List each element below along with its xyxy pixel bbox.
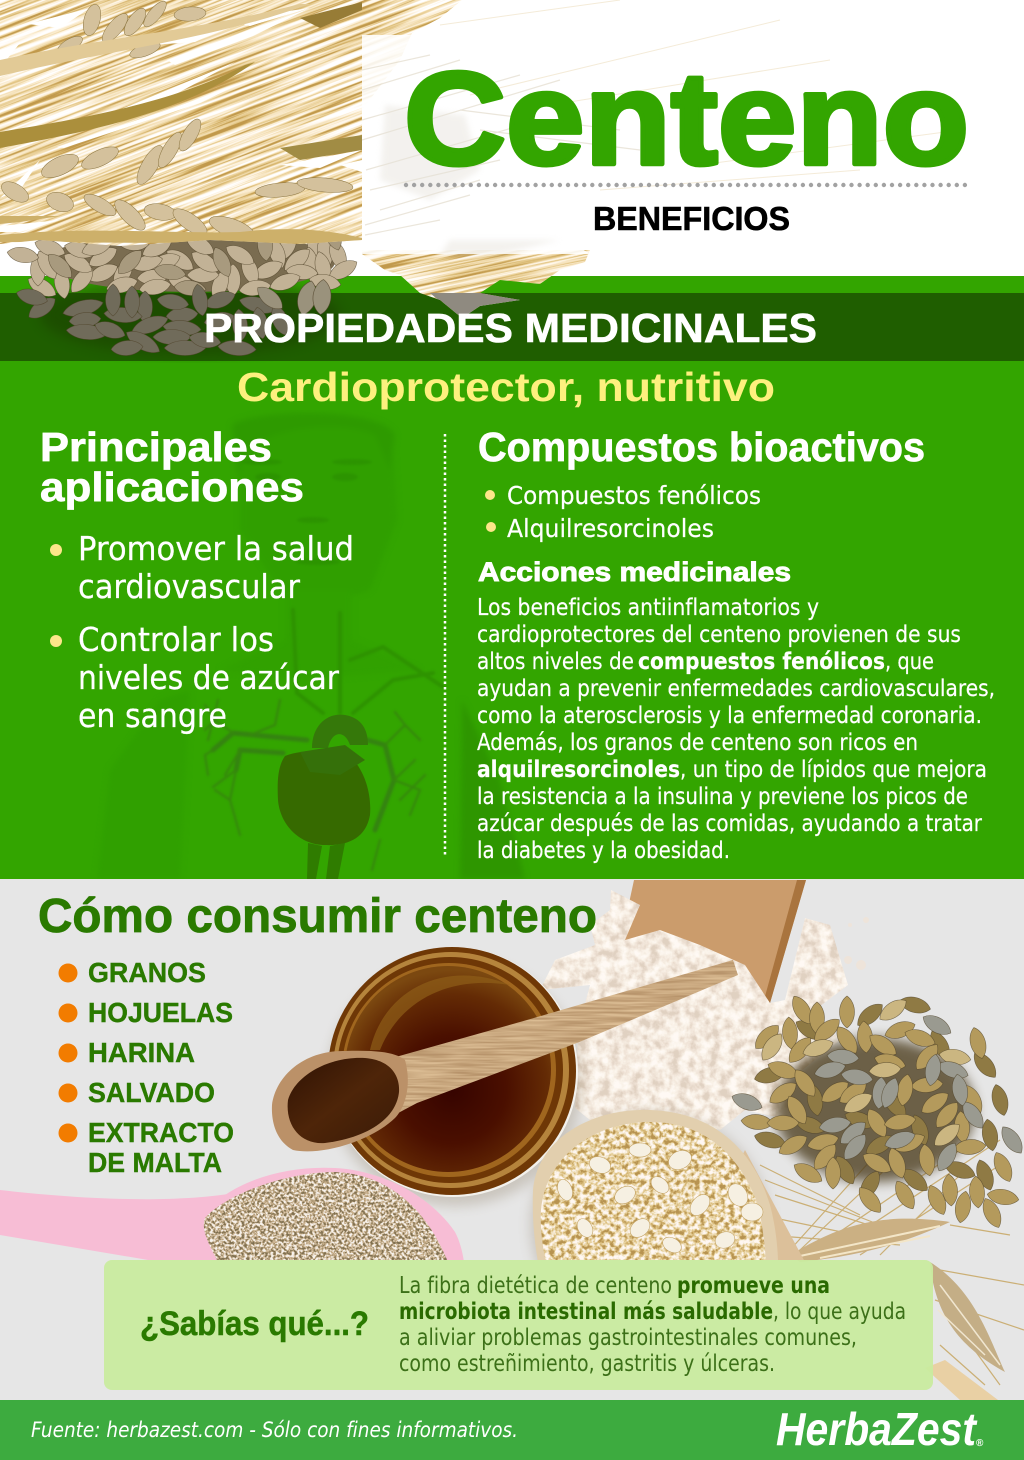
- divider: [444, 434, 446, 856]
- heading: medicinal properties: PROPIEDADES MEDICINALES: [204, 305, 817, 351]
- callout text: , lo que ayuda: [773, 1299, 906, 1325]
- list: consumption forms: EXTRACTO: [88, 1117, 234, 1148]
- subtitle: BENEFICIOS: [593, 200, 790, 237]
- list: consumption forms: DE MALTA: [88, 1147, 222, 1178]
- source note: Fuente: herbazest.com - Sólo con fines informativos.: [31, 1418, 518, 1442]
- illustration: wooden spoon with syrup: [272, 960, 738, 1151]
- subheading: medicinal actions: Acciones medicinales: [478, 557, 791, 587]
- text: medicinal actions paragraph: alquilresorcinoles: [477, 757, 680, 783]
- callout text: a aliviar problemas gastrointestinales comunes,: [399, 1325, 857, 1351]
- illustration: pink spoon with bran: [0, 1168, 464, 1262]
- text: medicinal actions paragraph: altos niveles de: [477, 649, 634, 675]
- text: medicinal actions paragraph: compuestos fenólicos: [638, 649, 885, 675]
- list: applications: [50, 529, 354, 735]
- text: medicinal actions paragraph: , un tipo de lípidos que mejora: [680, 757, 987, 783]
- illustration: rye grain pile: [6, 204, 361, 358]
- text: medicinal actions paragraph: la diabetes y la obesidad.: [477, 838, 730, 864]
- text: medicinal actions paragraph: cardioprotectores del centeno provienen de sus: [477, 622, 961, 648]
- list: applications: cardiovascular: [78, 567, 300, 606]
- callout text: promueve una: [677, 1273, 830, 1299]
- callout: did you know: [104, 1260, 933, 1390]
- callout text: como estreñimiento, gastritis y úlceras.: [399, 1351, 775, 1377]
- illustration: malt extract bowl: [327, 947, 583, 1206]
- illustration: pale translucent wheat behind title: [362, 0, 941, 316]
- panel: bioactive compounds: [477, 424, 995, 864]
- panel: how to consume background: [0, 879, 1024, 1400]
- list: applications: en sangre: [78, 696, 227, 735]
- illustration: flour and wooden scoop: [540, 880, 869, 1130]
- list: compounds: Alquilresorcinoles: [507, 514, 714, 543]
- illustration: human figure with heart: [204, 414, 524, 879]
- heading: main applications: Principales: [40, 424, 272, 470]
- list: consumption forms: [58, 957, 234, 1178]
- footer band: [0, 1400, 1024, 1460]
- panel: medicinal properties background: [0, 276, 1024, 879]
- heading: main applications: [40, 424, 304, 510]
- list: consumption forms: HARINA: [88, 1037, 195, 1068]
- list: compounds: Compuestos fenólicos: [507, 481, 761, 510]
- logo: HerbaZest: ®: [976, 1438, 984, 1449]
- illustration: wheat ears header: [0, 0, 462, 246]
- text: medicinal actions paragraph: , que: [885, 649, 934, 675]
- text: medicinal actions paragraph: Además, los granos de centeno son ricos en: [477, 730, 918, 756]
- panel: main applications: [40, 424, 354, 735]
- callout text: La fibra dietética de centeno: [399, 1273, 672, 1299]
- list: consumption forms: SALVADO: [88, 1077, 215, 1108]
- list: compounds: [485, 481, 761, 543]
- list: applications: niveles de azúcar: [78, 658, 339, 697]
- callout text: [399, 1273, 906, 1377]
- logo: HerbaZest: HerbaZest: [776, 1403, 977, 1455]
- list: consumption forms: GRANOS: [88, 957, 206, 988]
- title: Centeno: [404, 45, 969, 192]
- illustration: rye grains right: [729, 992, 1024, 1231]
- illustration: wheat awns and handle: [760, 1140, 1024, 1400]
- heading: how to consume: Cómo consumir centeno: [38, 890, 597, 943]
- subheading: cardioprotector: Cardioprotector, nutritivo: [237, 364, 775, 410]
- heading: bioactive compounds: Compuestos bioactivos: [478, 424, 925, 470]
- list: consumption forms: HOJUELAS: [88, 997, 233, 1028]
- list: applications: Controlar los: [78, 620, 274, 659]
- heading: main applications: aplicaciones: [40, 464, 304, 510]
- callout heading: ¿Sabías qué...?: [140, 1305, 369, 1343]
- text: medicinal actions paragraph: Los beneficios antiinflamatorios y: [477, 595, 819, 621]
- illustration: oat flakes spoon: [526, 1105, 804, 1260]
- text: medicinal actions paragraph: [477, 595, 995, 864]
- callout text: microbiota intestinal más saludable: [399, 1299, 773, 1325]
- list: applications: Promover la salud: [78, 529, 354, 568]
